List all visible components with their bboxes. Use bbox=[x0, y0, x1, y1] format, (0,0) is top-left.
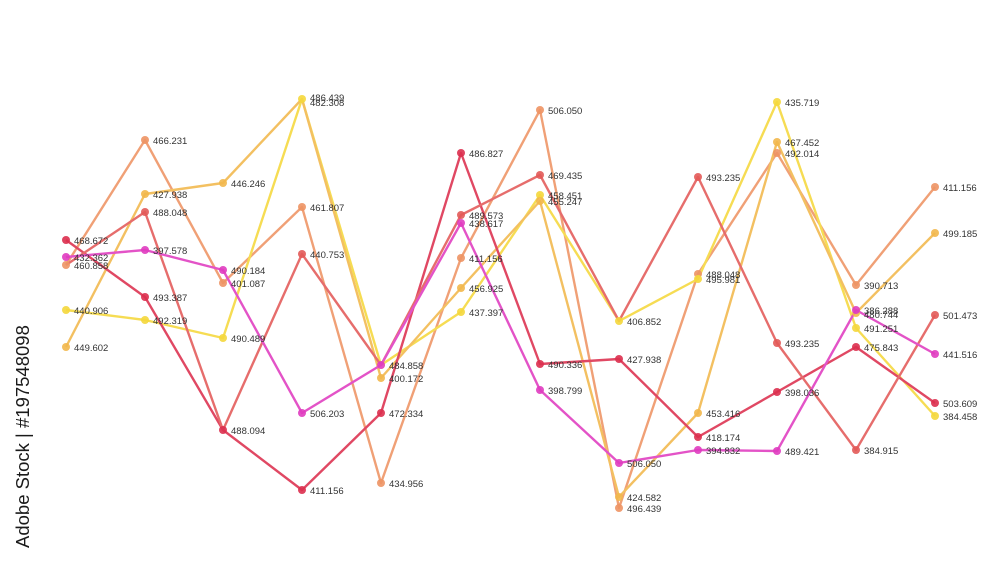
value labels: 482.308 bbox=[310, 98, 344, 109]
value labels: 437.397 bbox=[469, 308, 503, 319]
value labels: 490.336 bbox=[548, 360, 582, 371]
data points bbox=[62, 95, 939, 512]
value labels: 468.672 bbox=[74, 236, 108, 247]
value labels: 400.172 bbox=[389, 374, 423, 385]
value labels bbox=[74, 93, 977, 515]
value labels: 496.439 bbox=[627, 504, 661, 515]
value labels: 406.852 bbox=[627, 317, 661, 328]
value labels: 384.458 bbox=[943, 412, 977, 423]
value labels: 506.050 bbox=[627, 459, 661, 470]
value labels: 458.451 bbox=[548, 191, 582, 202]
side credit text: Adobe Stock | #197548098 bbox=[12, 325, 33, 548]
value labels: 460.858 bbox=[74, 261, 108, 272]
value labels: 394.832 bbox=[706, 446, 740, 457]
value labels: 493.235 bbox=[785, 339, 819, 350]
value labels: 480.744 bbox=[864, 310, 898, 321]
value labels: 424.582 bbox=[627, 493, 661, 504]
value labels: 397.578 bbox=[153, 246, 187, 257]
value labels: 488.048 bbox=[153, 208, 187, 219]
value labels: 434.956 bbox=[389, 479, 423, 490]
value labels: 411.156 bbox=[469, 254, 503, 265]
value labels: 455.247 bbox=[548, 197, 582, 208]
value labels: 492.319 bbox=[153, 316, 187, 327]
value labels: 440.906 bbox=[74, 306, 108, 317]
value labels: 499.185 bbox=[943, 229, 977, 240]
value labels: 493.235 bbox=[706, 173, 740, 184]
value labels: 506.203 bbox=[310, 409, 344, 420]
value labels: 490.489 bbox=[231, 334, 265, 345]
value labels: 432.362 bbox=[74, 253, 108, 264]
value labels: 491.251 bbox=[864, 324, 898, 335]
value labels: 488.048 bbox=[706, 270, 740, 281]
value labels: 484.858 bbox=[389, 361, 423, 372]
value labels: 427.938 bbox=[153, 190, 187, 201]
value labels: 488.094 bbox=[231, 426, 265, 437]
value labels: 441.516 bbox=[943, 350, 977, 361]
value labels: 411.156 bbox=[310, 486, 344, 497]
value labels: 469.435 bbox=[548, 171, 582, 182]
value labels: 467.452 bbox=[785, 138, 819, 149]
series lines bbox=[66, 99, 935, 508]
value labels: 489.421 bbox=[785, 447, 819, 458]
value labels: 466.231 bbox=[153, 136, 187, 147]
value labels: 493.387 bbox=[153, 293, 187, 304]
value labels: 411.156 bbox=[943, 183, 977, 194]
value labels: 386.288 bbox=[864, 306, 898, 317]
value labels: 495.981 bbox=[706, 275, 740, 286]
value labels: 492.014 bbox=[785, 149, 819, 160]
value labels: 501.473 bbox=[943, 311, 977, 322]
value labels: 438.617 bbox=[469, 219, 503, 230]
value labels: 506.050 bbox=[548, 106, 582, 117]
value labels: 390.713 bbox=[864, 281, 898, 292]
value labels: 427.938 bbox=[627, 355, 661, 366]
value labels: 475.843 bbox=[864, 343, 898, 354]
value labels: 486.827 bbox=[469, 149, 503, 160]
value labels: 490.184 bbox=[231, 266, 265, 277]
value labels: 435.719 bbox=[785, 98, 819, 109]
value labels: 384.915 bbox=[864, 446, 898, 457]
value labels: 446.246 bbox=[231, 179, 265, 190]
value labels: 503.609 bbox=[943, 399, 977, 410]
value labels: 418.174 bbox=[706, 433, 740, 444]
value labels: 440.753 bbox=[310, 250, 344, 261]
value labels: 449.602 bbox=[74, 343, 108, 354]
value labels: 401.087 bbox=[231, 279, 265, 290]
value labels: 461.807 bbox=[310, 203, 344, 214]
value labels: 398.799 bbox=[548, 386, 582, 397]
value labels: 472.334 bbox=[389, 409, 423, 420]
value labels: 456.925 bbox=[469, 284, 503, 295]
value labels: 398.036 bbox=[785, 388, 819, 399]
value labels: 453.416 bbox=[706, 409, 740, 420]
value labels: 489.573 bbox=[469, 211, 503, 222]
value labels: 486.439 bbox=[310, 93, 344, 104]
